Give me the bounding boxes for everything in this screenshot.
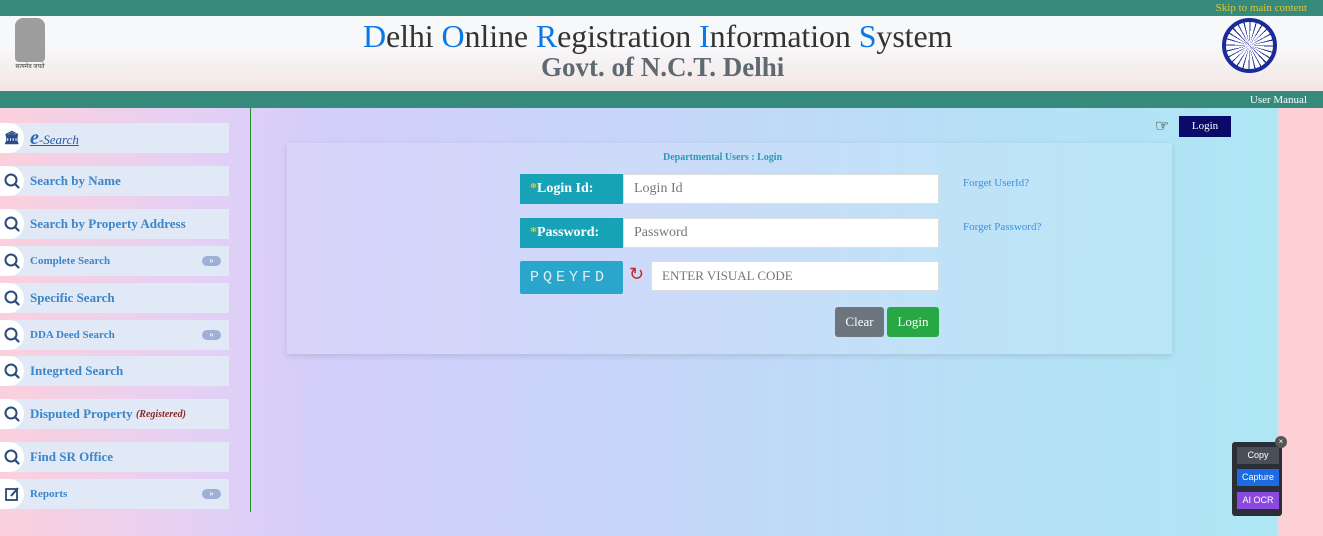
buttons: Login [897,314,929,329]
top login button [1155,116,1231,137]
icon: emblem: सत्यमेव जयते [15,64,45,70]
e-search [0,123,229,153]
visual code input [651,261,939,291]
panel heading: Departmental Users : Login [663,152,782,163]
search by property: Search by Property Address [30,216,186,231]
complete search [0,246,229,276]
icon: emblem [15,18,45,70]
nav bar: User Manual [1250,94,1307,106]
dda deed: DDA Deed Search [30,329,115,341]
captcha: PQEYFD [530,269,608,286]
search by property [0,209,229,239]
find sr [0,442,229,472]
e-search: 🏛 [4,130,20,145]
text: Forget Password? [963,221,1041,233]
text: Login Id [634,181,683,196]
top login button: Login [1192,120,1218,132]
login id field: *Login Id: [530,181,593,196]
search by name [0,166,229,196]
ocr widget [1232,442,1282,516]
sidebar [0,123,229,509]
find sr: Find SR Office [30,449,113,464]
captcha [520,261,623,294]
disputed [0,399,229,429]
visual code input: ENTER VISUAL CODE [662,268,793,283]
disputed: Disputed Property [30,406,133,421]
complete search: Complete Search [30,255,110,267]
specific search [0,283,229,313]
dda deed [0,320,229,350]
integrated: Integrted Search [30,363,123,378]
ocr widget: AI OCR [1242,495,1274,505]
title: Delhi Online Registration Information System [363,18,952,54]
login panel [287,143,1172,354]
text: Password [634,225,688,240]
search by name: Search by Name [30,173,121,188]
header banner [0,16,1323,92]
e-search: e-Search [30,126,79,148]
reports: » [210,489,214,498]
links: Forget UserId? [963,177,1029,189]
complete search: » [210,256,214,265]
buttons: Clear [845,314,874,329]
top bar [0,0,1323,16]
reports: Reports [30,488,67,500]
password field: *Password: [530,225,599,240]
dda deed: » [210,330,214,339]
reports [0,479,229,509]
login id field [520,174,623,204]
ocr widget: Copy [1247,450,1268,460]
password field [520,218,623,248]
nav bar [0,92,1323,108]
specific search: Specific Search [30,290,115,305]
text: × [1279,437,1283,446]
top bar: Skip to main content [1216,2,1307,14]
buttons [835,307,939,337]
integrated [0,356,229,386]
divider line [250,108,251,512]
subtitle: Govt. of N.C.T. Delhi [541,52,784,82]
icon: chakra [1222,18,1277,73]
ocr widget: Capture [1242,472,1274,482]
icon: refresh: ↻ [629,264,644,284]
top login button: ☞ [1155,118,1169,135]
disputed: (Registered) [136,408,186,420]
